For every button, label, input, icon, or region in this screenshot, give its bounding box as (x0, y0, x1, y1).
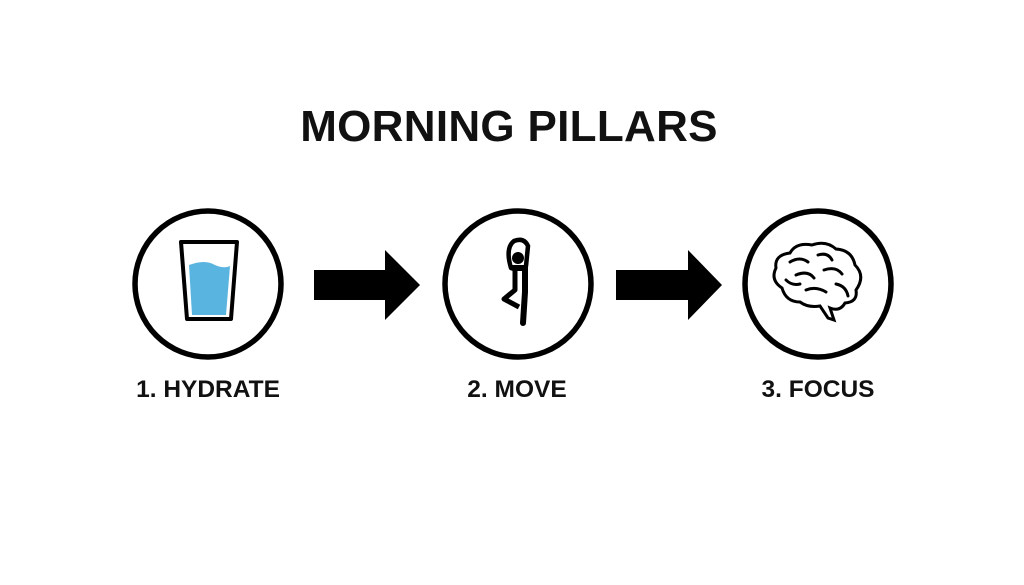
icon: yoga figure (445, 211, 591, 357)
arrow 2 (616, 250, 722, 320)
icon: brain (745, 211, 891, 357)
title: MORNING PILLARS (300, 102, 718, 151)
arrow 1 (314, 250, 420, 320)
label: hydrate: 1. HYDRATE (136, 376, 280, 403)
label: move: 2. MOVE (467, 376, 567, 403)
icon: water glass (135, 211, 281, 357)
label: focus: 3. FOCUS (762, 376, 874, 403)
